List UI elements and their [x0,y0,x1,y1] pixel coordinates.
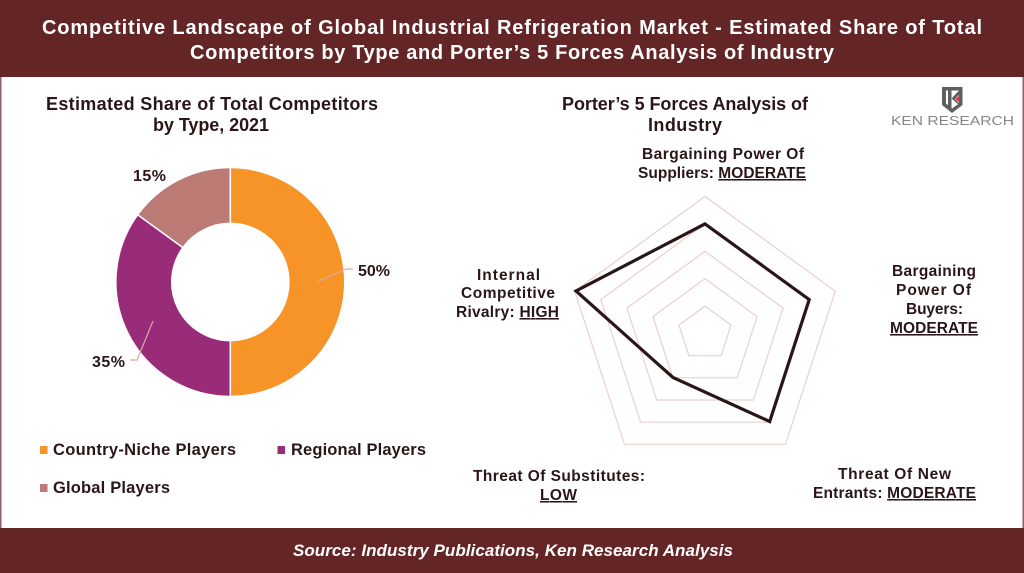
legend [40,441,426,497]
label: bargaining power of suppliers: Bargaining Power Of [642,146,805,163]
label: bargaining power of suppliers: Suppliers: MODERATE [638,165,806,182]
legend item: regional players: Regional Players [291,441,426,459]
heading: donut chart [46,94,378,135]
title [42,17,982,64]
label: threat of new entrants: Entrants: MODERATE [813,485,976,502]
label: threat of substitutes: Threat Of Substitutes: [473,468,645,485]
leader line: 35% [130,321,153,360]
logo: ken research [891,87,1014,128]
panel: porter's 5 forces [456,94,978,504]
label: bargaining power of suppliers [638,146,806,182]
heading: donut chart: by Type, 2021 [153,115,269,135]
panel: estimated share of competitors [40,94,426,497]
radar chart [575,196,835,444]
label: threat of substitutes: LOW [540,487,577,504]
label: bargaining power of buyers: Power Of [896,282,972,299]
label: bargaining power of buyers: Buyers: [906,301,963,318]
label: internal competitive rivalry [456,267,559,321]
heading: radar chart: Porter’s 5 Forces Analysis of [562,94,809,114]
label: threat of substitutes [473,468,645,504]
label: threat of new entrants: Threat Of New [838,466,952,483]
label: internal competitive rivalry: Rivalry: HIGH [456,304,559,321]
segment: regional players 35% [116,215,230,396]
heading: radar chart: Industry [648,115,722,135]
footer banner [0,528,1024,573]
label: threat of new entrants [813,466,976,502]
value: 15%: 15% [133,168,166,185]
title: Competitors by Type and Porter’s 5 Forces Analysis of Industry [190,42,835,64]
heading: radar chart [562,94,809,135]
radar data line [576,224,809,422]
label: bargaining power of buyers: MODERATE [890,320,978,337]
segment: country-niche players 50% [230,168,345,396]
donut chart [92,168,390,396]
heading: donut chart: Estimated Share of Total Competitors [46,94,378,114]
label: internal competitive rivalry: Internal [477,267,540,284]
legend item: global players: Global Players [53,479,170,497]
leader line: 50% [317,269,353,282]
label: bargaining power of buyers [890,263,978,337]
value: 50%: 50% [358,263,390,280]
segment: global players 15% [138,168,230,248]
value: 35%: 35% [92,354,125,371]
label: bargaining power of buyers: Bargaining [892,263,976,280]
legend item: country-niche players: Country-Niche Players [53,441,236,459]
title: Competitive Landscape of Global Industrial Refrigeration Market - Estimated Share of Total [42,17,982,39]
logo: ken research: KEN RESEARCH [891,114,1014,128]
label: internal competitive rivalry: Competitive [461,285,555,302]
icon: shield [942,87,962,113]
header banner [0,0,1024,77]
source text: Source: Industry Publications, Ken Research Analysis [293,541,733,560]
